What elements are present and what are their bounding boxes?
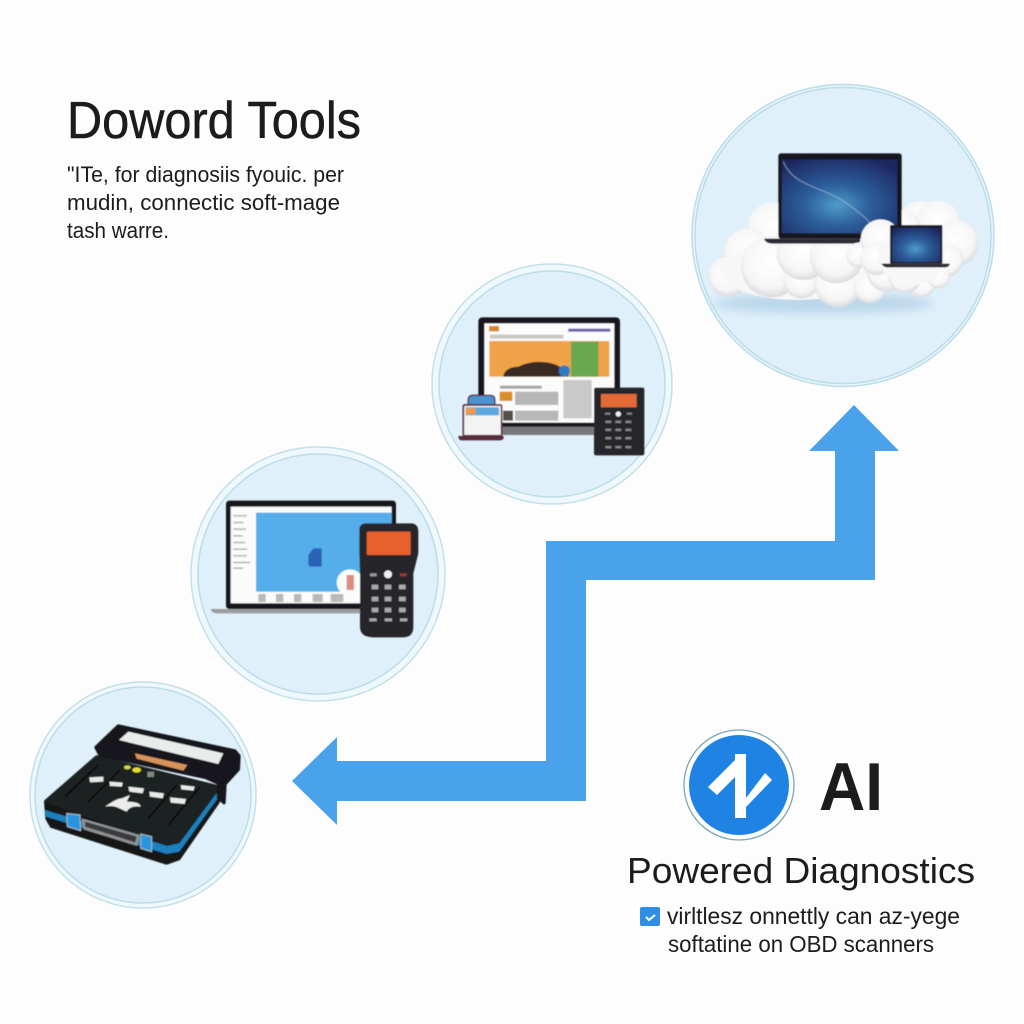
heading: AI: AI <box>819 749 883 825</box>
caption text: softatine on OBD scanners <box>668 931 934 957</box>
caption text <box>667 903 960 957</box>
panel: cloud software <box>692 84 994 386</box>
panel: OBD scanner <box>30 682 256 908</box>
intro text <box>67 162 344 243</box>
scanner head <box>96 726 239 803</box>
icon: cloud with laptops <box>708 153 978 313</box>
icon: check box <box>640 907 660 926</box>
handset <box>594 388 644 455</box>
intro text: mudin, connectic soft-mage <box>67 190 340 215</box>
intro text: "ITe, for diagnosiis fyouic. per <box>67 162 344 187</box>
icon: AI logo <box>684 730 794 840</box>
handset <box>359 523 418 637</box>
laptop <box>211 501 396 613</box>
heading: Powered Diagnostics: Powered Diagnostics <box>627 850 975 891</box>
arrow: stepped path rising from scanner to cloud <box>292 405 899 825</box>
caption text: virltlesz onnettly can az-yege <box>667 903 960 929</box>
icon: laptop, tablet and handset <box>458 317 644 455</box>
intro text: tash warre. <box>67 218 169 243</box>
icon: laptop and handset <box>211 501 418 637</box>
icon: OBD scanner <box>45 726 239 863</box>
key ridges <box>65 765 200 825</box>
panel: laptop and handset software <box>191 447 445 701</box>
panel: web software <box>432 264 672 504</box>
title: Doword Tools <box>67 92 361 150</box>
small laptop <box>882 225 950 267</box>
small tablet <box>458 395 504 440</box>
laptop <box>478 317 620 435</box>
large laptop <box>764 153 902 244</box>
